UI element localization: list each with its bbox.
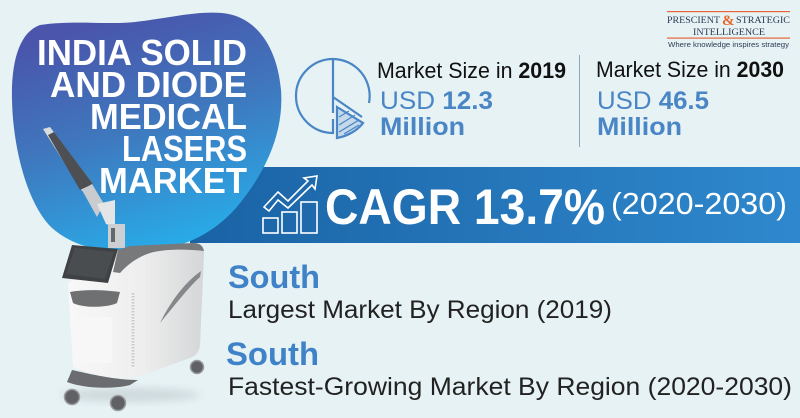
divider bbox=[579, 55, 580, 147]
stat: market size 2030: Million bbox=[597, 113, 682, 141]
title bbox=[37, 32, 247, 201]
icon: pie chart bbox=[296, 59, 370, 138]
laser arm bbox=[43, 127, 125, 248]
stat: market size 2030: USD 46.5 bbox=[597, 87, 709, 115]
logo: Where knowledge inspires strategy bbox=[668, 42, 790, 49]
base bbox=[67, 370, 138, 388]
stat: market size 2019: USD 12.3 bbox=[380, 87, 493, 115]
logo: & bbox=[722, 13, 734, 29]
touch screen bbox=[62, 245, 118, 283]
region: fastest-growing market: South bbox=[226, 336, 319, 372]
title: MEDICAL bbox=[90, 96, 247, 137]
region: largest market bbox=[228, 259, 612, 324]
title: MARKET bbox=[99, 160, 247, 201]
CAGR value: CAGR 13.7% bbox=[325, 179, 605, 235]
title: AND DIODE bbox=[50, 64, 247, 105]
stat: market size 2030 bbox=[596, 57, 784, 141]
logo: STRATEGIC bbox=[736, 16, 790, 26]
vent bbox=[132, 293, 134, 367]
logo: PRESCIENT bbox=[667, 16, 720, 26]
side contour bbox=[160, 271, 201, 323]
machine shadow bbox=[60, 388, 200, 402]
icon: growth chart bbox=[263, 176, 317, 233]
stat: market size 2030: Market Size in 2030 bbox=[596, 57, 784, 82]
top panel bbox=[113, 243, 204, 273]
region: fastest-growing market bbox=[226, 336, 792, 401]
front panel bbox=[70, 290, 120, 307]
region: fastest-growing market: Fastest-Growing Market By Region (2020-2030) bbox=[228, 373, 792, 401]
title: LASERS bbox=[122, 128, 247, 169]
stat: market size 2019: Market Size in 2019 bbox=[377, 58, 566, 83]
casters bbox=[64, 360, 204, 410]
cabinet body bbox=[68, 243, 204, 378]
logo: INTELLIGENCE bbox=[693, 28, 765, 38]
title: INDIA SOLID bbox=[37, 32, 247, 73]
stat: market size 2019 bbox=[377, 58, 566, 141]
region: largest market: Largest Market By Region (2019) bbox=[228, 296, 612, 324]
stat: market size 2019: Million bbox=[380, 113, 465, 141]
title blob bbox=[12, 13, 281, 252]
CAGR band bbox=[190, 167, 800, 243]
region: largest market: South bbox=[228, 259, 320, 295]
CAGR period: (2020-2030) bbox=[611, 186, 787, 221]
laser machine bbox=[43, 127, 204, 410]
logo bbox=[667, 11, 790, 49]
